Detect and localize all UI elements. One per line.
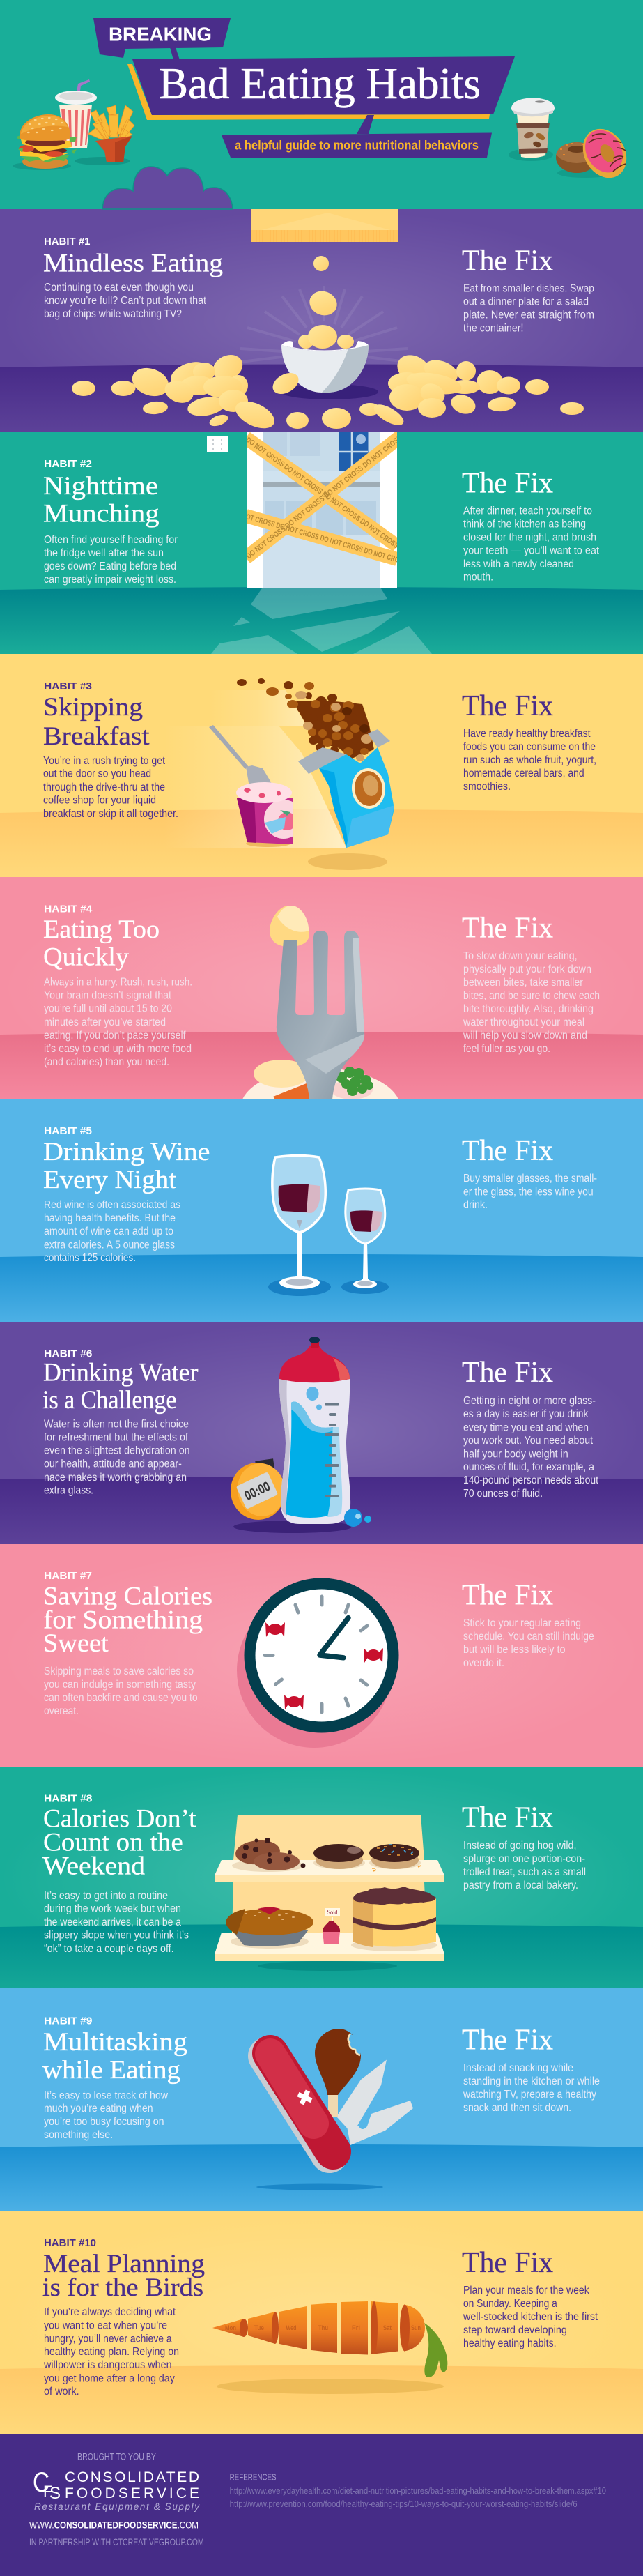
partnership: IN PARTNERSHIP WITH CTCREATIVEGROUP.COM [29,2536,204,2547]
icon: soda cup [55,79,97,148]
banner: main title [127,56,515,120]
thought cloud [102,167,233,209]
fix description: pastry from a local bakery. [463,1880,578,1891]
fix heading: The Fix [462,2024,553,2056]
habit description: slippery slope when you think it’s [44,1930,189,1942]
habit description [44,1666,198,1717]
habit description: during the work week but when [44,1903,181,1915]
heading: Mindless Eating [43,250,223,277]
habit description: It’s easy to get into a routine [44,1890,168,1902]
habit description: amount of wine can add up to [44,1226,173,1237]
icon: bowl [281,341,369,393]
icon: cereal flying out [237,678,374,761]
fix description: splurge on one portion-con- [463,1853,585,1865]
fix heading: The Fix [462,467,553,499]
background [0,432,643,654]
logo: consolidated foodservice: Restaurant Equipment & Supply [34,2501,200,2512]
icon: carrot greens [424,2323,447,2377]
connector: title to subtitle [357,115,374,134]
icon: stopwatch: 00:00 [242,1479,272,1504]
references: http://www.prevention.com/food/healthy-eating-tips/10-ways-to-quit-your-worst-eating-habits/slide/6 [230,2499,578,2509]
fix description: step toward developing [463,2324,567,2336]
fix heading: The Fix [462,913,553,945]
fix description: drink. [463,1199,488,1211]
references: REFERENCES [230,2472,277,2483]
illustration: taped-off kitchen: DO NOT CROSS DO NOT CROSS DO NOT CROSS DO NOT CROSS [231,509,408,567]
background [0,1767,643,1988]
icon: red knife [267,2053,333,2154]
habit label: HABIT #2 [44,458,92,470]
heading: is a Challenge [42,1386,177,1415]
fix description: the container! [463,323,524,335]
fix description: bite thoroughly. Also, drinking [463,1003,594,1015]
floor reflections [211,586,432,654]
icon: sliced carrot [212,2301,425,2355]
icon: spoon [209,725,273,790]
habit description: nace makes it worth grabbing an [44,1472,187,1484]
icon: small wine glass [341,1189,389,1294]
habit label: HABIT #9 [44,2015,92,2027]
fix description: overdo it. [463,1657,504,1669]
heading: Count on the [43,1828,183,1857]
habit description: having health benefits. But the [44,1212,176,1224]
fix description: standing in the kitchen or while [463,2075,600,2087]
habit description: Always in a hurry. Rush, rush, rush. [44,977,192,989]
heading: Munching [43,500,159,528]
habit description: you’re full until about 15 to 20 [44,1003,172,1015]
habit label: HABIT #8 [44,1792,92,1804]
fix description: well-stocked kitchen is the first [463,2311,598,2323]
habit description: healthy eating plan. Relying on [44,2346,179,2358]
fix description: half your body weight in [463,1448,568,1460]
heading [42,2250,205,2302]
habit description: extra glass. [44,1485,93,1497]
heading: Quickly [43,943,130,972]
heading: Breakfast [43,722,150,751]
fix heading: The Fix [462,1357,553,1389]
heading: Eating Too [43,915,160,944]
icon: cupcake with sold tag: Sold [327,1909,338,1916]
fix description [463,1617,594,1669]
habit description: for refreshment but the effects of [44,1432,189,1444]
website: WWW.CONSOLIDATEDFOODSERVICE.COM [29,2520,199,2531]
fix description [463,1840,586,1891]
habit description [43,2306,179,2398]
heading: Weekend [42,1852,146,1880]
panel: habit 10 [0,2211,643,2434]
heading [43,693,150,751]
fix description [463,728,596,793]
icon: bakery shelves [215,1815,444,1961]
illustration: taped-off kitchen: DO NOT CROSS DO NOT CROSS DO NOT CROSS DO NOT CROSS [245,436,400,550]
fix description: Instead of going hog wild, [463,1840,577,1852]
habit description: the fridge well after the sun [44,547,164,559]
habit description: minutes after you’ve started [44,1016,166,1028]
fix heading: The Fix [462,2247,553,2279]
icon: sliced carrot: Mon [225,2324,236,2332]
fix description: will help you slow down and [463,1030,587,1042]
icon: large wine glass [268,1156,331,1296]
fix heading: The Fix [462,245,553,277]
habit description: know you’re full? Can’t put down that [44,295,207,307]
fix description: schedule. You can still indulge [463,1631,594,1643]
background [0,877,643,1099]
fix description: smoothies. [463,781,511,793]
heading: Multitasking [43,2028,187,2057]
fix description: every time you eat and when [463,1422,589,1433]
habit description: it’s easy to end up with more food [44,1043,192,1055]
heading [42,2028,187,2085]
habit description: out the door so you head [43,768,151,780]
habit description: “ok” to take a couple days off. [44,1943,174,1955]
fix description: After dinner, teach yourself to [463,505,592,517]
chips in the air and bowl [298,256,354,349]
fix description: physically put your fork down [463,963,591,975]
panel: habit 9 [0,1988,643,2211]
heading: Every Night [43,1166,177,1194]
habit description [44,1199,180,1264]
habit description: much you’re eating when [44,2103,153,2114]
light rays [235,286,412,363]
habit description: Skipping meals to save calories so [44,1666,194,1677]
heading: Meal Planning [43,2250,205,2278]
habit description: Continuing to eat even though you [44,282,194,294]
motion trail [164,690,346,848]
habit description: Water is often not the first choice [44,1418,189,1431]
heading: Nighttime [43,472,158,501]
habit description: bag of chips while watching TV? [44,308,182,320]
background [0,654,643,877]
fix description [463,950,600,1055]
icon: fork [277,931,364,1099]
habit description: the weekend arrives, it can be a [44,1916,181,1928]
icon: sliced carrot: Tue [254,2324,264,2332]
icon: cupcake with sold tag [323,1908,340,1944]
habit description: overeat. [44,1705,79,1717]
icon: blades [336,2059,413,2145]
heading: while Eating [42,2056,180,2085]
habit description: can greatly impair weight loss. [44,574,176,586]
logo: consolidated foodservice: FOODSERVICE [65,2485,199,2501]
background [0,209,643,432]
habit description: If you’re always deciding what [44,2306,176,2318]
icon: water drops [344,1509,371,1527]
habit description: you can indulge in something tasty [44,1679,196,1691]
banner: subtitle: a helpful guide to more nutritional behaviors [235,139,479,153]
background [0,1322,643,1544]
banner: main title: Bad Eating Habits [159,59,481,108]
habit description: You’re in a rush trying to get [43,755,166,767]
icon: pie [226,1907,313,1949]
shelf shadow [258,1961,397,1971]
icon: plain donut [313,1844,365,1869]
fix description: between bites, take smaller [463,977,583,989]
background [0,1988,643,2211]
fix description [463,1395,599,1500]
icon: donuts [556,121,635,186]
habit label: HABIT #10 [44,2237,96,2249]
scattered chips [72,349,584,434]
fix description: you work out. You need about [463,1435,594,1447]
logo: consolidated foodservice: F [43,2483,52,2500]
clock shadow [237,1593,392,1748]
connector: breaking to title [170,47,180,60]
icon: fries [75,105,134,165]
icon: yogurt cup [236,782,293,847]
fix description: 140-pound person needs about [463,1474,599,1486]
habit description: coffee shop for your liquid [43,795,156,807]
fix description: mouth. [463,572,493,584]
icon: sprinkle donut [369,1844,421,1871]
panel: habit 7 [0,1544,643,1767]
habit description: contains 125 calories. [44,1252,136,1264]
fix description [463,283,594,335]
heading [42,1805,196,1880]
habit label: HABIT #7 [44,1570,92,1582]
heading [43,1138,210,1194]
icon: chip bag [251,209,398,242]
heading: Sweet [43,1629,109,1658]
panel: footer [0,2434,643,2576]
fix description: bites, and be sure to chew each [463,990,600,1002]
fix description: feel fuller as you go. [463,1043,550,1055]
habit description: you want to eat when you’re [44,2319,167,2331]
fix description: think of the kitchen as being [463,519,586,531]
icon: clock [244,1578,398,1733]
icon: cereal bag [298,729,394,870]
bowl shadow [281,384,378,399]
fix description [463,2062,600,2114]
habit description: Red wine is often associated as [44,1199,180,1211]
icon: stopwatch [226,1458,352,1533]
fix description: closed for the night, and brush [463,531,596,544]
icon: burger [13,114,77,170]
header background [0,0,643,209]
heading: Saving Calories [43,1582,212,1610]
fix description: trolled treat, such as a small [463,1866,586,1878]
icon: layer cake [351,1887,437,1951]
icon: small white sign [207,436,228,452]
panel: habit 3 [0,654,643,877]
icon: potato on fork [270,906,309,947]
fix description: snack and then sit down. [463,2102,571,2114]
heading: for Something [43,1606,203,1634]
carrot shadow [217,2379,444,2394]
habit description [44,282,207,320]
banner: breaking: BREAKING [109,24,212,45]
icon: sliced carrot: Wed [286,2324,297,2332]
habit description: It’s easy to lose track of how [44,2089,169,2101]
banner: breaking [93,18,231,58]
brought to you by: BROUGHT TO YOU BY [77,2452,156,2462]
fix description: Plan your meals for the week [463,2285,589,2296]
habit description: of work. [44,2386,79,2398]
icon: cookies [232,1838,305,1872]
habit label: HABIT #4 [44,903,93,915]
habit description [44,977,192,1068]
habit description: can often backfire and cause you to [44,1692,198,1704]
fix description: out a dinner plate for a salad [463,296,589,308]
habit description: even the slightest dehydration on [44,1445,190,1457]
habit description [44,534,178,586]
icon: sliced carrot: Sun [411,2324,421,2332]
habit description [43,755,178,820]
panel: header [0,0,643,209]
fix description: but will be less likely to [463,1644,566,1656]
fix description: less with a newly cleaned [463,558,574,570]
fix description: es a day is easier if you drink [463,1408,589,1420]
habit label: HABIT #1 [44,236,91,247]
heading: Drinking Water [43,1359,198,1387]
fix description: Have ready healthy breakfast [463,728,591,740]
fix description: on Sunday. Keeping a [463,2298,557,2310]
knife shadow [256,2183,383,2190]
fix heading: The Fix [462,1579,553,1611]
fix description: Instead of snacking while [463,2062,573,2074]
heading [42,1359,198,1415]
fix heading: The Fix [462,690,553,722]
habit description: something else. [44,2129,113,2141]
icon: drumstick [315,2029,364,2117]
fix description: watching TV, prepare a healthy [463,2089,596,2101]
habit description: through the drive-thru at the [43,782,165,793]
fix description: water throughout your meal [463,1016,584,1028]
heading: Calories Don’t [43,1805,196,1834]
fix description: foods you can consume on the [463,741,596,753]
illustration: taped-off kitchen: DO NOT CROSS DO NOT CROSS DO NOT CROSS DO NOT CROSS [245,434,404,561]
habit label: HABIT #6 [44,1348,92,1359]
fix description: your teeth — you’ll want to eat [463,545,600,557]
fix heading: The Fix [462,1802,553,1834]
fix description: Stick to your regular eating [463,1617,581,1629]
logo: consolidated foodservice: S [49,2484,61,2503]
logo: consolidated foodservice: CONSOLIDATED [65,2469,199,2485]
heading [43,915,160,972]
background [0,1099,643,1322]
habit description: goes down? Eating before bed [44,561,176,572]
panel: habit 6 [0,1322,643,1544]
fix description: homemade cereal bars, and [463,768,584,779]
panel: habit 8 [0,1767,643,1988]
footer background [0,2434,643,2576]
icon: sliced carrot: Sat [383,2324,392,2332]
fix description: run such as whole fruit, yogurt, [463,754,596,766]
fix description: plate. Never eat straight from [463,310,594,321]
heading: Skipping [43,693,143,722]
banner: subtitle [222,132,492,158]
habit description: eating. If you don’t pace yourself [44,1030,186,1042]
icon: sliced carrot: Thu [318,2324,328,2332]
habit description: willpower is dangerous when [43,2359,172,2371]
references [230,2472,606,2509]
habit description [44,2089,169,2141]
background [0,2211,643,2434]
fix description: To slow down your eating, [463,950,578,962]
fix description [463,505,600,584]
fix heading: The Fix [462,1135,553,1167]
habit description: extra calories. A 5 ounce glass [44,1239,175,1251]
habit label: HABIT #3 [44,680,92,692]
habit description: Your brain doesn’t signal that [44,989,172,1001]
fix description: Buy smaller glasses, the small- [463,1173,597,1184]
fix description: Getting in eight or more glass- [463,1395,596,1407]
fix description: healthy eating habits. [463,2338,557,2349]
fix description: 70 ounces of fluid. [463,1488,543,1500]
icon: plate of food [242,1060,398,1099]
habit description: you’re too busy focusing on [44,2116,164,2128]
icon: sliced carrot: Fri [352,2324,360,2332]
fix description [463,2285,598,2349]
fix description: ounces of fluid, for example, a [463,1461,594,1473]
habit description: breakfast or skip it all together. [43,808,178,820]
icon: water bottle [279,1337,350,1524]
habit description: (and calories) than you need. [44,1056,169,1068]
icon: coffee cup [509,98,555,161]
fix description [463,1173,597,1211]
heading [43,472,159,528]
background [0,1544,643,1767]
logo: consolidated foodservice [33,2467,200,2512]
habit description: our health, attitude and appear- [44,1458,182,1470]
habit description: you get home after a long day [44,2372,175,2384]
panel: habit 5 [0,1099,643,1322]
habit description: Often find yourself heading for [44,534,178,546]
fix description: Eat from smaller dishes. Swap [463,283,594,294]
panel: habit 4 [0,877,643,1099]
heading [43,1582,212,1658]
habit description [44,1890,189,1955]
fix description: er the glass, the less wine you [463,1187,594,1198]
panel: habit 1 [0,167,643,434]
heading: is for the Birds [42,2273,203,2302]
panel: habit 2 [0,432,643,654]
habit description: hungry, you’ll never achieve a [44,2333,172,2345]
heading: Drinking Wine [43,1138,210,1166]
habit description [44,1418,190,1497]
habit label: HABIT #5 [44,1125,92,1137]
logo: consolidated foodservice: C [33,2467,49,2498]
